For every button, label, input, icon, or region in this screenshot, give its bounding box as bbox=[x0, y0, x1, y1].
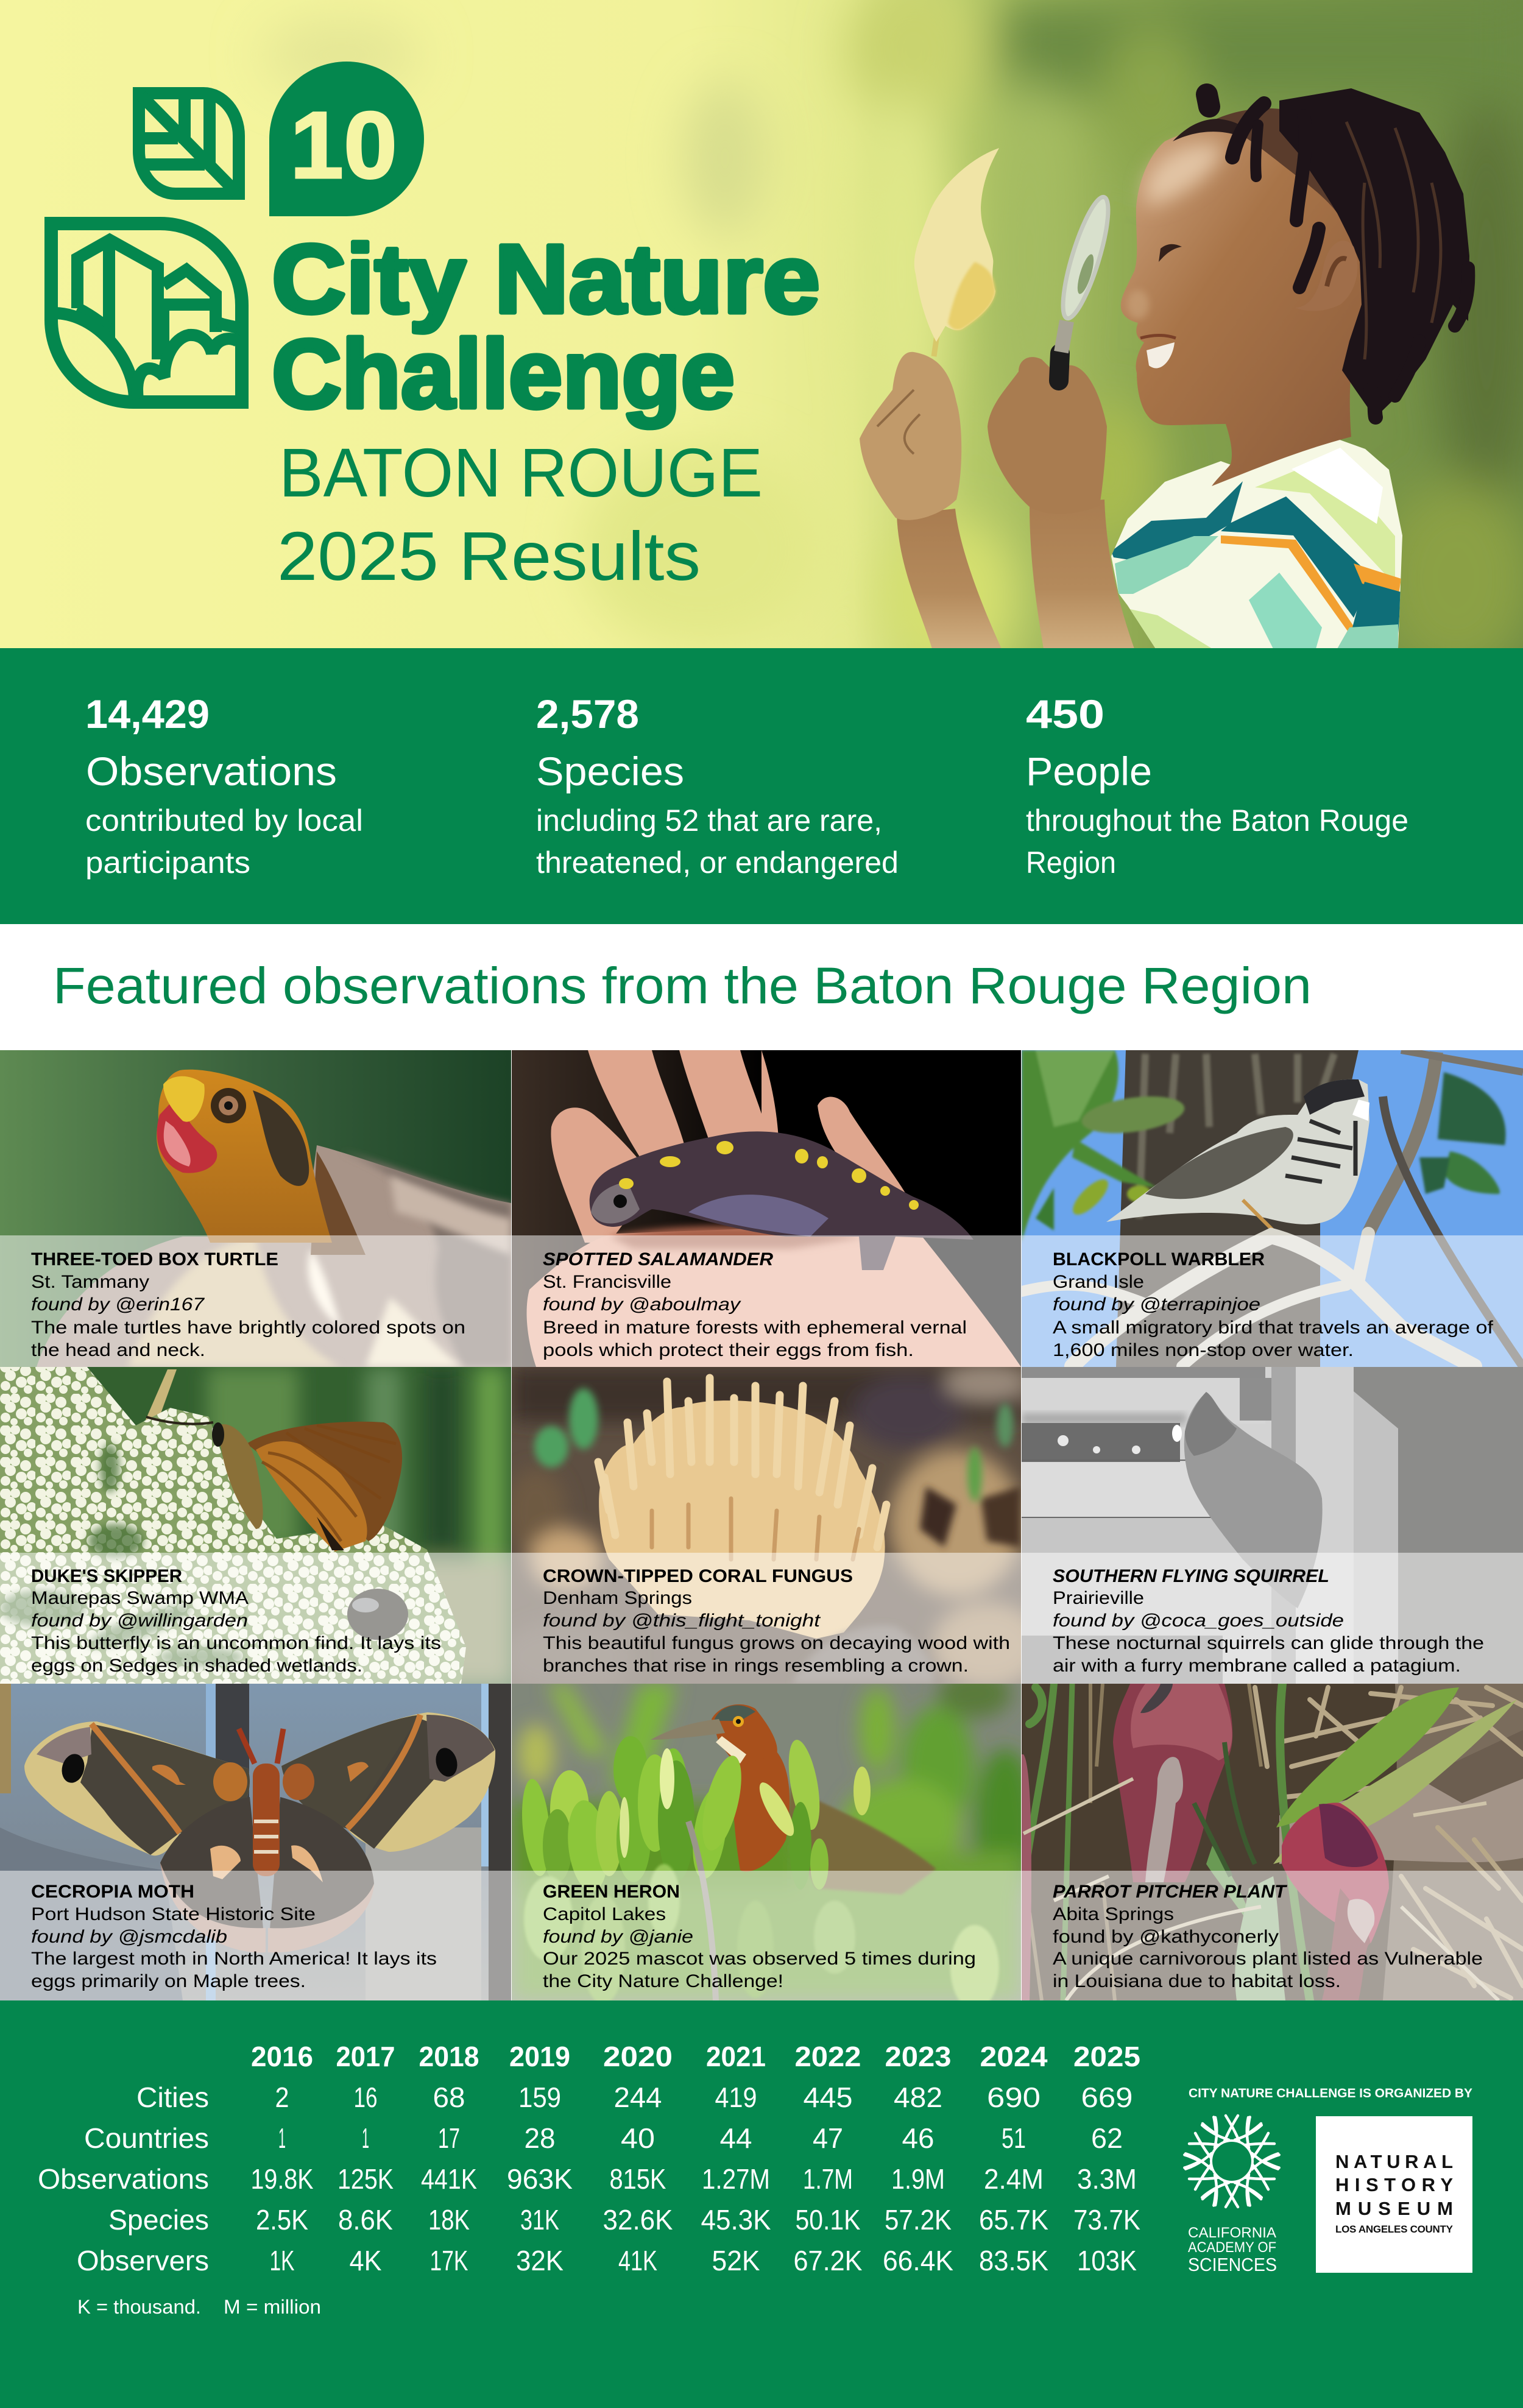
caption text: found by @janie bbox=[543, 1927, 693, 1947]
table row: cities: 482 bbox=[894, 2081, 942, 2113]
card: parrot pitcher plant bbox=[1022, 1684, 1523, 2000]
table row: observations: Observations bbox=[38, 2163, 209, 2195]
table row: observations: 125K bbox=[337, 2163, 394, 2195]
stat: people: Region bbox=[1026, 846, 1116, 880]
logo: Natural History Museum: LOS ANGELES COUNTY bbox=[1335, 2223, 1454, 2235]
table row: cities: 445 bbox=[803, 2081, 853, 2113]
caption text: THREE-TOED BOX TURTLE bbox=[31, 1249, 278, 1269]
caption text: eggs primarily on Maple trees. bbox=[31, 1971, 306, 1991]
heading: featured observations: Featured observations from the Baton Rouge Region bbox=[53, 957, 1312, 1014]
table row: observations: 441K bbox=[421, 2163, 477, 2195]
card: spotted salamander bbox=[512, 1050, 1021, 1367]
table header: years: 2021 bbox=[706, 2041, 766, 2072]
table row: species: 57.2K bbox=[885, 2204, 952, 2236]
table row: observations: 1.9M bbox=[891, 2163, 945, 2195]
caption text: eggs on Sedges in shaded wetlands. bbox=[31, 1656, 362, 1676]
card: green heron bbox=[512, 1669, 1036, 2010]
caption text bbox=[1053, 1249, 1494, 1360]
caption text: found by @willingarden bbox=[31, 1611, 248, 1631]
table row: species bbox=[108, 2204, 1140, 2236]
table row: observers: 52K bbox=[712, 2245, 760, 2276]
caption text bbox=[31, 1882, 437, 1991]
caption text: Breed in mature forests with ephemeral vernal bbox=[543, 1318, 967, 1338]
table row: species: Species bbox=[108, 2204, 209, 2236]
photo: salamander on hand bbox=[512, 1050, 1021, 1367]
caption text: found by @terrapinjoe bbox=[1053, 1294, 1260, 1315]
table header: years: 2023 bbox=[885, 2041, 952, 2072]
caption text: St. Tammany bbox=[31, 1272, 149, 1292]
caption text: Capitol Lakes bbox=[543, 1904, 666, 1924]
footnote: K and M legend bbox=[77, 2296, 321, 2318]
green leaves bbox=[1276, 1687, 1459, 1827]
caption text bbox=[543, 1882, 976, 1991]
stat: people: People bbox=[1026, 749, 1152, 794]
logo: Natural History Museum: MUSEUM bbox=[1335, 2198, 1453, 2219]
caption text: The largest moth in North America! It lays its bbox=[31, 1949, 437, 1969]
stat: species bbox=[536, 691, 899, 880]
logo wordmark: Challenge bbox=[272, 319, 735, 428]
photo: squirrel bbox=[1022, 1367, 1523, 1684]
table row: cities bbox=[136, 2081, 1133, 2113]
caption text: found by @kathyconerly bbox=[1053, 1927, 1279, 1947]
table row: cities: 68 bbox=[433, 2081, 465, 2113]
table row: cities: 159 bbox=[518, 2081, 561, 2113]
caption text: This beautiful fungus grows on decaying wood with bbox=[543, 1633, 1010, 1653]
ear bbox=[1295, 241, 1357, 311]
photo: skipper bbox=[0, 1367, 512, 1684]
caption text: PARROT PITCHER PLANT bbox=[1053, 1882, 1288, 1902]
table row: species: 65.7K bbox=[979, 2204, 1048, 2236]
caption panel bbox=[0, 1553, 511, 1684]
table row: observers: 17K bbox=[430, 2245, 468, 2276]
caption text bbox=[543, 1566, 1010, 1676]
table row: cities: 2 bbox=[275, 2081, 289, 2113]
table row: observers bbox=[77, 2245, 1137, 2276]
caption panel bbox=[1022, 1235, 1523, 1367]
caption panel bbox=[512, 1553, 1021, 1684]
table row: species: 18K bbox=[428, 2204, 470, 2236]
stat: species: including 52 that are rare, bbox=[536, 803, 882, 838]
stat: species: threatened, or endangered bbox=[536, 846, 899, 880]
caption text: SOUTHERN FLYING SQUIRREL bbox=[1053, 1566, 1329, 1586]
caption text bbox=[31, 1249, 465, 1360]
stat: people bbox=[1026, 691, 1408, 880]
stat: observations: contributed by local bbox=[85, 803, 363, 838]
photo: pitcher plant bbox=[1022, 1684, 1523, 2000]
table row: species: 45.3K bbox=[701, 2204, 771, 2236]
butterfly wings bbox=[247, 1422, 402, 1541]
table row: observers: 41K bbox=[618, 2245, 657, 2276]
eye and smile bbox=[1159, 244, 1182, 262]
logo: Natural History Museum: NATURAL bbox=[1335, 2151, 1453, 2172]
caption text bbox=[543, 1249, 967, 1360]
table row: observations: 815K bbox=[609, 2163, 666, 2195]
hair bbox=[1173, 88, 1469, 418]
table row: countries: 17 bbox=[438, 2122, 460, 2154]
table row: countries: 1 bbox=[278, 2122, 286, 2154]
footnote: K and M legend: K = thousand. bbox=[77, 2296, 201, 2318]
table header: years: 2019 bbox=[509, 2041, 570, 2072]
shirt bbox=[1097, 426, 1413, 658]
caption text: The male turtles have brightly colored spots on bbox=[31, 1318, 465, 1338]
title: Baton Rouge 2025 Results: 2025 Results bbox=[277, 518, 701, 595]
icon: yellow leaf bbox=[914, 148, 999, 356]
caption panel bbox=[512, 1871, 1021, 2000]
table row: countries: 44 bbox=[720, 2122, 752, 2154]
card: southern flying squirrel bbox=[1022, 1367, 1523, 1684]
academy wordmark: ACADEMY OF bbox=[1188, 2239, 1276, 2256]
table: global results by year bbox=[38, 2041, 1140, 2276]
stat: species: 2,578 bbox=[536, 691, 639, 736]
magnifying glass bbox=[1055, 193, 1117, 381]
table row: cities: 419 bbox=[715, 2081, 757, 2113]
caption text: These nocturnal squirrels can glide through the bbox=[1053, 1633, 1484, 1653]
pitcher 1 bbox=[1113, 1684, 1232, 1882]
caption text bbox=[1053, 1882, 1483, 1991]
logo: California Academy of Sciences bbox=[1178, 2113, 1286, 2275]
arm and left hand bbox=[897, 509, 1002, 649]
logo wordmark: City Nature bbox=[272, 224, 820, 333]
table row: species: 73.7K bbox=[1073, 2204, 1140, 2236]
table row: observers: 67.2K bbox=[793, 2245, 863, 2276]
table row: countries: 47 bbox=[813, 2122, 843, 2154]
table row: observers: 1K bbox=[269, 2245, 295, 2276]
caption text: the head and neck. bbox=[31, 1340, 205, 1360]
caption text: air with a furry membrane called a patagium. bbox=[1053, 1656, 1461, 1676]
table row: cities: 16 bbox=[353, 2081, 378, 2113]
caption text: Grand Isle bbox=[1053, 1272, 1144, 1292]
icon: academy emblem bbox=[1178, 2113, 1286, 2209]
caption text: branches that rise in rings resembling a crown. bbox=[543, 1656, 969, 1676]
table header: years: 2022 bbox=[794, 2041, 861, 2072]
table row: countries: 40 bbox=[621, 2122, 655, 2154]
table row: observers: 32K bbox=[516, 2245, 564, 2276]
stats band bbox=[0, 648, 1523, 924]
caption panel bbox=[0, 1235, 511, 1367]
caption text: SPOTTED SALAMANDER bbox=[543, 1249, 773, 1269]
logo icon: city and nature bbox=[51, 224, 242, 402]
table row: species: 31K bbox=[520, 2204, 559, 2236]
leaves bbox=[518, 1736, 871, 1893]
stat: observations: Observations bbox=[86, 749, 337, 794]
heron bird bbox=[786, 1786, 936, 1894]
table row: countries: 46 bbox=[902, 2122, 935, 2154]
caption text bbox=[31, 1566, 441, 1676]
table header: years: 2025 bbox=[1073, 2041, 1140, 2072]
title: Baton Rouge 2025 Results: BATON ROUGE bbox=[279, 434, 763, 511]
caption text: the City Nature Challenge! bbox=[543, 1971, 783, 1991]
table header: years: 2020 bbox=[603, 2041, 673, 2072]
arm and right hand bbox=[1030, 500, 1134, 649]
photo: coral fungus bbox=[500, 1365, 1042, 1693]
footnote: K and M legend: M = million bbox=[224, 2296, 321, 2318]
table row: species: 8.6K bbox=[338, 2204, 393, 2236]
right forewing bbox=[281, 1712, 495, 1852]
caption text: A unique carnivorous plant listed as Vulnerable bbox=[1053, 1949, 1483, 1969]
table header: years: 2024 bbox=[980, 2041, 1048, 2072]
hero photo background bbox=[0, 0, 1523, 676]
stat: people: 450 bbox=[1026, 691, 1104, 736]
footer band bbox=[0, 2000, 1523, 2408]
table row: countries: 1 bbox=[362, 2122, 369, 2154]
table row: species: 32.6K bbox=[603, 2204, 673, 2236]
caption text: found by @aboulmay bbox=[543, 1294, 741, 1315]
table row: observers: 4K bbox=[350, 2245, 382, 2276]
card: cecropia moth bbox=[0, 1684, 511, 2000]
caption text: in Louisiana due to habitat loss. bbox=[1053, 1971, 1341, 1991]
card: three-toed box turtle bbox=[0, 1050, 511, 1367]
card: blackpoll warbler bbox=[1022, 1050, 1523, 1367]
caption text: DUKE'S SKIPPER bbox=[31, 1566, 182, 1586]
caption text: found by @jsmcdalib bbox=[31, 1927, 227, 1947]
table row: countries bbox=[84, 2122, 1123, 2154]
academy wordmark bbox=[1188, 2225, 1277, 2275]
caption text: found by @coca_goes_outside bbox=[1053, 1611, 1344, 1631]
caption text: St. Francisville bbox=[543, 1272, 671, 1292]
photo: heron bbox=[512, 1669, 1036, 2010]
logo: Natural History Museum: HISTORY bbox=[1335, 2174, 1453, 2195]
table row: observers: Observers bbox=[77, 2245, 209, 2276]
card: duke's skipper bbox=[0, 1367, 512, 1684]
photo: warbler bbox=[1022, 1050, 1523, 1367]
caption panel bbox=[0, 1871, 511, 2000]
logo: Natural History Museum bbox=[1316, 2116, 1472, 2273]
hero section bbox=[0, 0, 1523, 676]
caption text: This butterfly is an uncommon find. It lays its bbox=[31, 1633, 441, 1653]
stat: observations: 14,429 bbox=[85, 691, 210, 736]
stat: people: throughout the Baton Rouge bbox=[1026, 803, 1408, 838]
icon: child with magnifying glass bbox=[860, 88, 1469, 658]
table row: observations: 3.3M bbox=[1077, 2163, 1137, 2195]
logo wordmark bbox=[272, 224, 820, 428]
left forewing bbox=[24, 1721, 250, 1855]
table header: years bbox=[251, 2041, 1140, 2072]
table row: observations: 1.7M bbox=[803, 2163, 853, 2195]
caption text: A small migratory bird that travels an average of bbox=[1053, 1318, 1494, 1338]
caption text: Port Hudson State Historic Site bbox=[31, 1904, 316, 1924]
table row: cities: 244 bbox=[614, 2081, 662, 2113]
caption text: GREEN HERON bbox=[543, 1882, 680, 1902]
card: crown-tipped coral fungus bbox=[500, 1365, 1042, 1693]
table row: observations: 19.8K bbox=[251, 2163, 314, 2195]
caption text: pools which protect their eggs from fish. bbox=[543, 1340, 914, 1360]
table row: observations: 963K bbox=[507, 2163, 573, 2195]
table header: years: 2017 bbox=[336, 2041, 395, 2072]
table row: cities: Cities bbox=[136, 2081, 209, 2113]
pitcher 2 bbox=[1282, 1802, 1389, 1943]
stat: observations: participants bbox=[85, 846, 250, 880]
photo: moth bbox=[0, 1684, 511, 2000]
table row: observers: 103K bbox=[1077, 2245, 1137, 2276]
table header: years: 2018 bbox=[419, 2041, 479, 2072]
table row: countries: 62 bbox=[1091, 2122, 1123, 2154]
table header: years: 2016 bbox=[251, 2041, 313, 2072]
caption panel bbox=[1022, 1871, 1523, 2000]
table row: cities: 690 bbox=[987, 2081, 1041, 2113]
organizers heading: CITY NATURE CHALLENGE IS ORGANIZED BY bbox=[1189, 2086, 1472, 2100]
caption text bbox=[1053, 1566, 1484, 1676]
caption text: Denham Springs bbox=[543, 1588, 692, 1608]
caption text: 1,600 miles non-stop over water. bbox=[1053, 1340, 1354, 1360]
table row: species: 2.5K bbox=[256, 2204, 308, 2236]
caption panel bbox=[1022, 1553, 1523, 1684]
academy wordmark: CALIFORNIA bbox=[1188, 2225, 1276, 2241]
table row: observations: 1.27M bbox=[702, 2163, 770, 2195]
stat: observations bbox=[85, 691, 363, 880]
table row: observers: 66.4K bbox=[883, 2245, 953, 2276]
logo badge: 10 bbox=[269, 62, 424, 216]
table row: cities: 669 bbox=[1081, 2081, 1133, 2113]
table row: observations bbox=[38, 2163, 1137, 2195]
caption text: Prairieville bbox=[1053, 1588, 1144, 1608]
caption text: BLACKPOLL WARBLER bbox=[1053, 1249, 1265, 1269]
caption text: Our 2025 mascot was observed 5 times during bbox=[543, 1949, 976, 1969]
logo icon: leaf bbox=[139, 93, 239, 194]
table row: species: 50.1K bbox=[796, 2204, 861, 2236]
table row: countries: Countries bbox=[84, 2122, 209, 2154]
table row: observers: 83.5K bbox=[979, 2245, 1048, 2276]
stat: species: Species bbox=[536, 749, 684, 794]
caption text: CECROPIA MOTH bbox=[31, 1882, 194, 1902]
academy wordmark: SCIENCES bbox=[1188, 2254, 1277, 2275]
caption panel bbox=[512, 1235, 1021, 1367]
logo badge: 10: 10 bbox=[290, 93, 397, 199]
table row: countries: 28 bbox=[524, 2122, 556, 2154]
caption text: Maurepas Swamp WMA bbox=[31, 1588, 249, 1608]
neck and head bbox=[1121, 114, 1375, 486]
caption text: CROWN-TIPPED CORAL FUNGUS bbox=[543, 1566, 853, 1586]
caption text: found by @erin167 bbox=[31, 1294, 205, 1315]
caption text: found by @this_flight_tonight bbox=[543, 1611, 821, 1631]
photo: turtle bbox=[0, 1050, 511, 1367]
title: Baton Rouge 2025 Results bbox=[277, 434, 763, 595]
fly bbox=[347, 1589, 408, 1640]
table row: countries: 51 bbox=[1002, 2122, 1026, 2154]
caption text: Abita Springs bbox=[1053, 1904, 1174, 1924]
table row: observations: 2.4M bbox=[984, 2163, 1044, 2195]
